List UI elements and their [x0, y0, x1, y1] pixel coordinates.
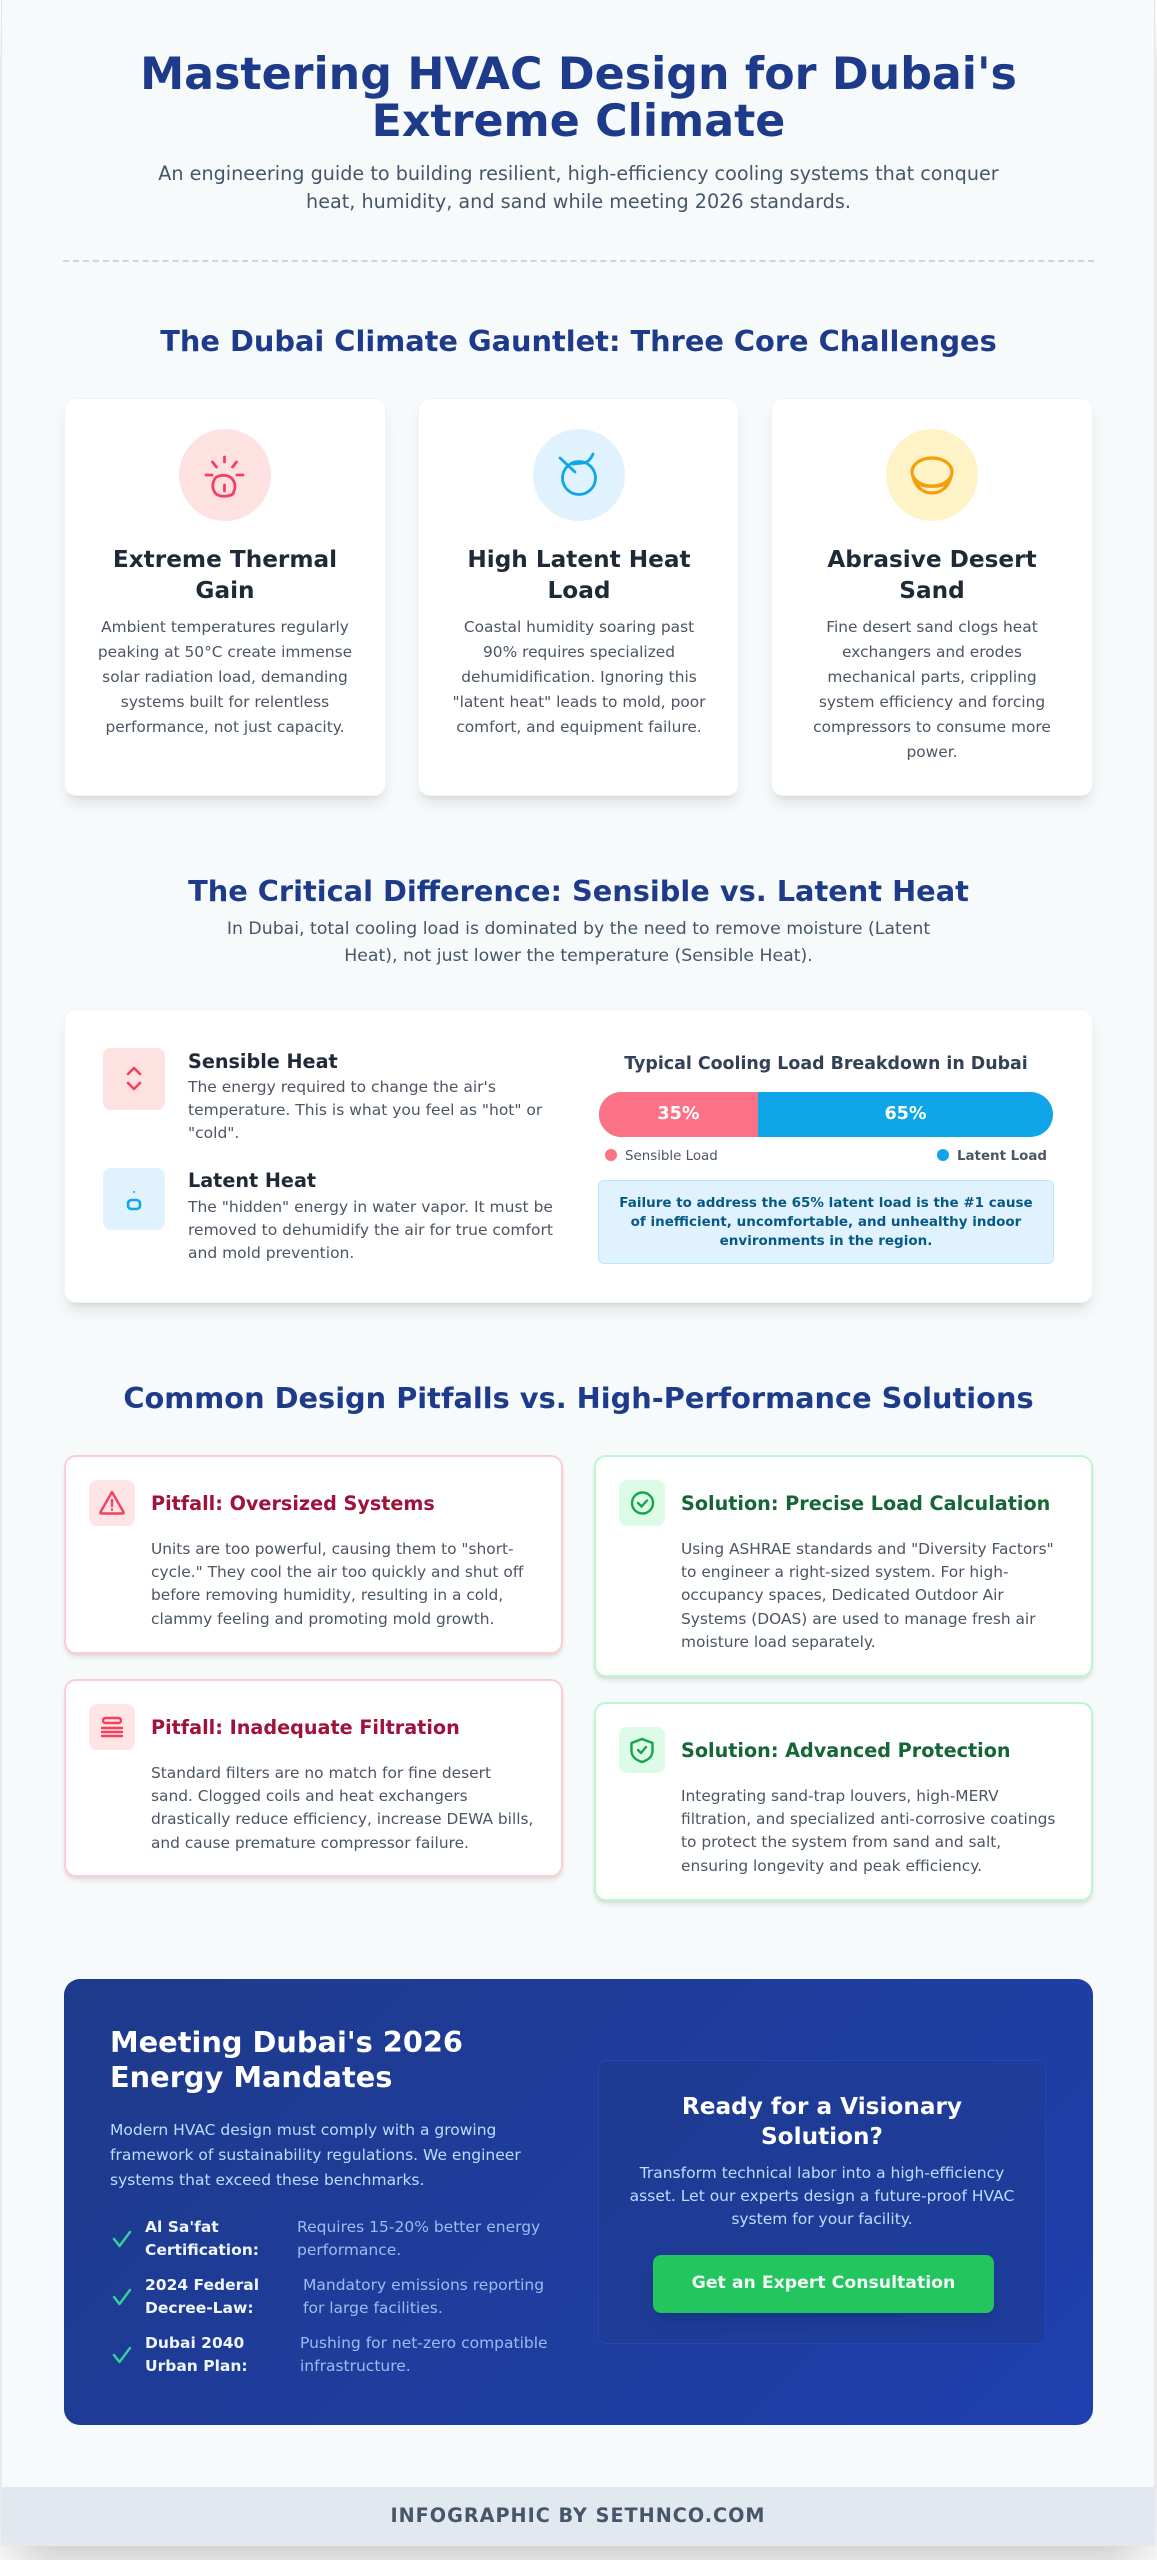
callout: [598, 1180, 1054, 1264]
pitfall text: drastically reduce efficiency, increase DEWA bills,: [151, 1810, 533, 1828]
mandates heading: Meeting Dubai's 2026: [110, 2025, 463, 2059]
card text: power.: [906, 743, 958, 761]
card text: system efficiency and forcing: [819, 693, 1045, 711]
title: Extreme Climate: [372, 96, 785, 147]
callout: environments in the region.: [720, 1233, 932, 1249]
solution text: Integrating sand-trap louvers, high-MERV: [681, 1787, 999, 1805]
title: [140, 49, 1017, 147]
label: Decree-Law:: [145, 2299, 254, 2317]
panel: call to action: [598, 2060, 1046, 2344]
card text: Ambient temperatures regularly: [101, 618, 349, 636]
callout: Failure to address the 65% latent load is the #1 cause: [619, 1194, 1033, 1210]
solution text: occupancy spaces, Dedicated Outdoor Air: [681, 1586, 1004, 1604]
cta text: asset. Let our experts design a future-proof HVAC: [630, 2187, 1014, 2205]
card text: [98, 618, 352, 736]
cta heading: [682, 2093, 962, 2150]
description: Mandatory emissions reporting: [303, 2276, 544, 2294]
cta heading: Ready for a Visionary: [682, 2093, 962, 2120]
heading: pitfalls vs solutions: Common Design Pitfalls vs. High-Performance Solutions: [123, 1381, 1034, 1415]
pitfall text: and cause premature compressor failure.: [151, 1834, 469, 1852]
description: infrastructure.: [300, 2357, 411, 2375]
panel: 2026 energy mandates: [64, 1979, 1093, 2425]
pitfall title: Pitfall: Inadequate Filtration: [151, 1716, 460, 1738]
icon: check: [112, 2288, 132, 2306]
solution text: [681, 1787, 1055, 1875]
label: [145, 2276, 259, 2317]
sensible heat text: "cold".: [188, 1124, 239, 1142]
cta text: Transform technical labor into a high-efficiency: [640, 2164, 1004, 2182]
latent segment: 65%: [884, 1104, 927, 1124]
panel: sensible vs latent: [64, 1009, 1093, 1303]
latent heat text: The "hidden" energy in water vapor. It must be: [188, 1198, 553, 1216]
card text: "latent heat" leads to mold, poor: [452, 693, 706, 711]
legend: sensible: Sensible Load: [625, 1149, 718, 1164]
mandates text: [110, 2121, 521, 2189]
icon: sand: [886, 429, 978, 521]
card title: [113, 546, 337, 604]
sensible heat text: temperature. This is what you feel as "hot" or: [188, 1101, 542, 1119]
card text: systems built for relentless: [121, 693, 329, 711]
solution text: Systems (DOAS) are used to manage fresh air: [681, 1610, 1036, 1628]
latent heat title: Latent Heat: [188, 1169, 316, 1192]
label: [145, 2334, 248, 2375]
panel: solution advanced protection: [594, 1702, 1093, 1901]
sensible segment: 35%: [657, 1104, 700, 1124]
card title: Abrasive Desert: [827, 546, 1037, 573]
card text: compressors to consume more: [813, 718, 1051, 736]
sensible heat title: Sensible Heat: [188, 1050, 338, 1073]
mandates text: systems that exceed these benchmarks.: [110, 2171, 424, 2189]
label: 2024 Federal: [145, 2276, 259, 2294]
card text: 90% requires specialized: [483, 643, 675, 661]
icon: heat sun: [179, 429, 271, 521]
pitfall text: clammy feeling and promoting mold growth.: [151, 1610, 494, 1628]
description: Pushing for net-zero compatible: [300, 2334, 548, 2352]
card title: Extreme Thermal: [113, 546, 337, 573]
label: Al Sa'fat: [145, 2218, 219, 2236]
checklist item: urban plan: [112, 2334, 548, 2375]
checklist item: federal decree: [112, 2276, 544, 2317]
card text: Fine desert sand clogs heat: [826, 618, 1038, 636]
card title: Gain: [195, 577, 255, 604]
solution text: to protect the system from sand and salt,: [681, 1833, 1001, 1851]
mandates text: framework of sustainability regulations. We engineer: [110, 2146, 521, 2164]
description: for large facilities.: [303, 2299, 443, 2317]
stacked bar chart: [599, 1092, 1053, 1137]
description: [303, 2276, 544, 2317]
card text: exchangers and erodes: [842, 643, 1022, 661]
title: Mastering HVAC Design for Dubai's: [140, 49, 1017, 100]
panel: solution precise load calculation: [594, 1455, 1093, 1677]
button: [653, 2255, 994, 2313]
label: Certification:: [145, 2241, 259, 2259]
card text: Coastal humidity soaring past: [464, 618, 694, 636]
icon: filter: [89, 1704, 135, 1750]
panel: high latent heat load: [418, 398, 739, 796]
icon: shield: [619, 1727, 665, 1773]
button: Get an Expert Consultation: [692, 2273, 955, 2293]
solution text: moisture load separately.: [681, 1633, 876, 1651]
icon: humidity: [533, 429, 625, 521]
sensible heat text: [188, 1078, 542, 1142]
latent heat text: removed to dehumidify the air for true comfort: [188, 1221, 553, 1239]
panel: pitfall inadequate filtration: [64, 1679, 563, 1877]
panel: abrasive desert sand: [771, 398, 1093, 796]
panel: extreme thermal gain: [64, 398, 386, 796]
card title: Load: [548, 577, 610, 604]
section intro: [227, 919, 930, 966]
icon: latent heat: [103, 1168, 165, 1230]
card title: [467, 546, 691, 604]
chart title: Typical Cooling Load Breakdown in Dubai: [624, 1054, 1028, 1074]
card text: [452, 618, 706, 736]
subtitle: heat, humidity, and sand while meeting 2026 standards.: [306, 190, 851, 212]
cta text: system for your facility.: [731, 2210, 913, 2228]
card text: dehumidification. Ignoring this: [461, 668, 697, 686]
card title: [827, 546, 1037, 604]
card text: performance, not just capacity.: [105, 718, 345, 736]
pitfall text: Standard filters are no match for fine desert: [151, 1764, 491, 1782]
icon: check circle: [619, 1480, 665, 1526]
label: [145, 2218, 259, 2259]
mandates text: Modern HVAC design must comply with a growing: [110, 2121, 496, 2139]
card title: Sand: [899, 577, 965, 604]
sensible segment: [599, 1092, 758, 1137]
solution text: filtration, and specialized anti-corrosive coatings: [681, 1810, 1055, 1828]
label: Urban Plan:: [145, 2357, 248, 2375]
pitfall text: sand. Clogged coils and heat exchangers: [151, 1787, 468, 1805]
pitfall text: [151, 1540, 524, 1628]
label: Dubai 2040: [145, 2334, 244, 2352]
callout: of inefficient, uncomfortable, and unhealthy indoor: [631, 1214, 1021, 1230]
solution text: Using ASHRAE standards and "Diversity Factors": [681, 1540, 1054, 1558]
icon: sensible heat: [103, 1048, 165, 1110]
pitfall text: [151, 1764, 533, 1852]
description: Requires 15-20% better energy: [297, 2218, 540, 2236]
pitfall text: cycle." They cool the air too quickly and shut off: [151, 1563, 523, 1581]
sensible heat text: The energy required to change the air's: [188, 1078, 496, 1096]
latent heat text: [188, 1198, 553, 1262]
card text: mechanical parts, crippling: [827, 668, 1037, 686]
pitfall text: Units are too powerful, causing them to "short-: [151, 1540, 514, 1558]
solution title: Solution: Advanced Protection: [681, 1738, 1011, 1762]
cta text: [630, 2164, 1014, 2228]
checklist item: Al Sa'fat: [112, 2218, 540, 2259]
panel: pitfall oversized systems: [64, 1455, 563, 1654]
description: [297, 2218, 540, 2259]
card text: peaking at 50°C create immense: [98, 643, 352, 661]
solution title: Solution: Precise Load Calculation: [681, 1492, 1050, 1514]
description: [300, 2334, 548, 2375]
icon: check: [112, 2346, 132, 2364]
solution text: to engineer a right-sized system. For high-: [681, 1563, 1009, 1581]
heading: climate gauntlet: The Dubai Climate Gauntlet: Three Core Challenges: [160, 324, 997, 358]
footer: INFOGRAPHIC BY SETHNCO.COM: [390, 2504, 766, 2527]
mandates heading: [110, 2025, 463, 2094]
card text: comfort, and equipment failure.: [456, 718, 702, 736]
pitfall text: before removing humidity, resulting in a cold,: [151, 1586, 503, 1604]
card text: [813, 618, 1051, 761]
cta heading: Solution?: [761, 2123, 883, 2150]
pitfall title: Pitfall: Oversized Systems: [151, 1492, 435, 1514]
solution text: ensuring longevity and peak efficiency.: [681, 1857, 982, 1875]
subtitle: [158, 162, 999, 212]
latent heat text: and mold prevention.: [188, 1244, 354, 1262]
section intro: In Dubai, total cooling load is dominated by the need to remove moisture (Latent: [227, 919, 930, 939]
footer: [1, 2487, 1155, 2546]
solution text: [681, 1540, 1054, 1651]
icon: warning: [89, 1480, 135, 1526]
card text: solar radiation load, demanding: [102, 668, 348, 686]
section intro: Heat), not just lower the temperature (Sensible Heat).: [344, 946, 813, 966]
legend: latent: Latent Load: [957, 1149, 1047, 1164]
subtitle: An engineering guide to building resilient, high-efficiency cooling systems that conquer: [158, 162, 999, 185]
card title: High Latent Heat: [467, 546, 691, 573]
icon: check: [112, 2230, 132, 2248]
heading: critical difference: The Critical Difference: Sensible vs. Latent Heat: [188, 874, 969, 908]
mandates heading: Energy Mandates: [110, 2060, 392, 2094]
description: performance.: [297, 2241, 401, 2259]
